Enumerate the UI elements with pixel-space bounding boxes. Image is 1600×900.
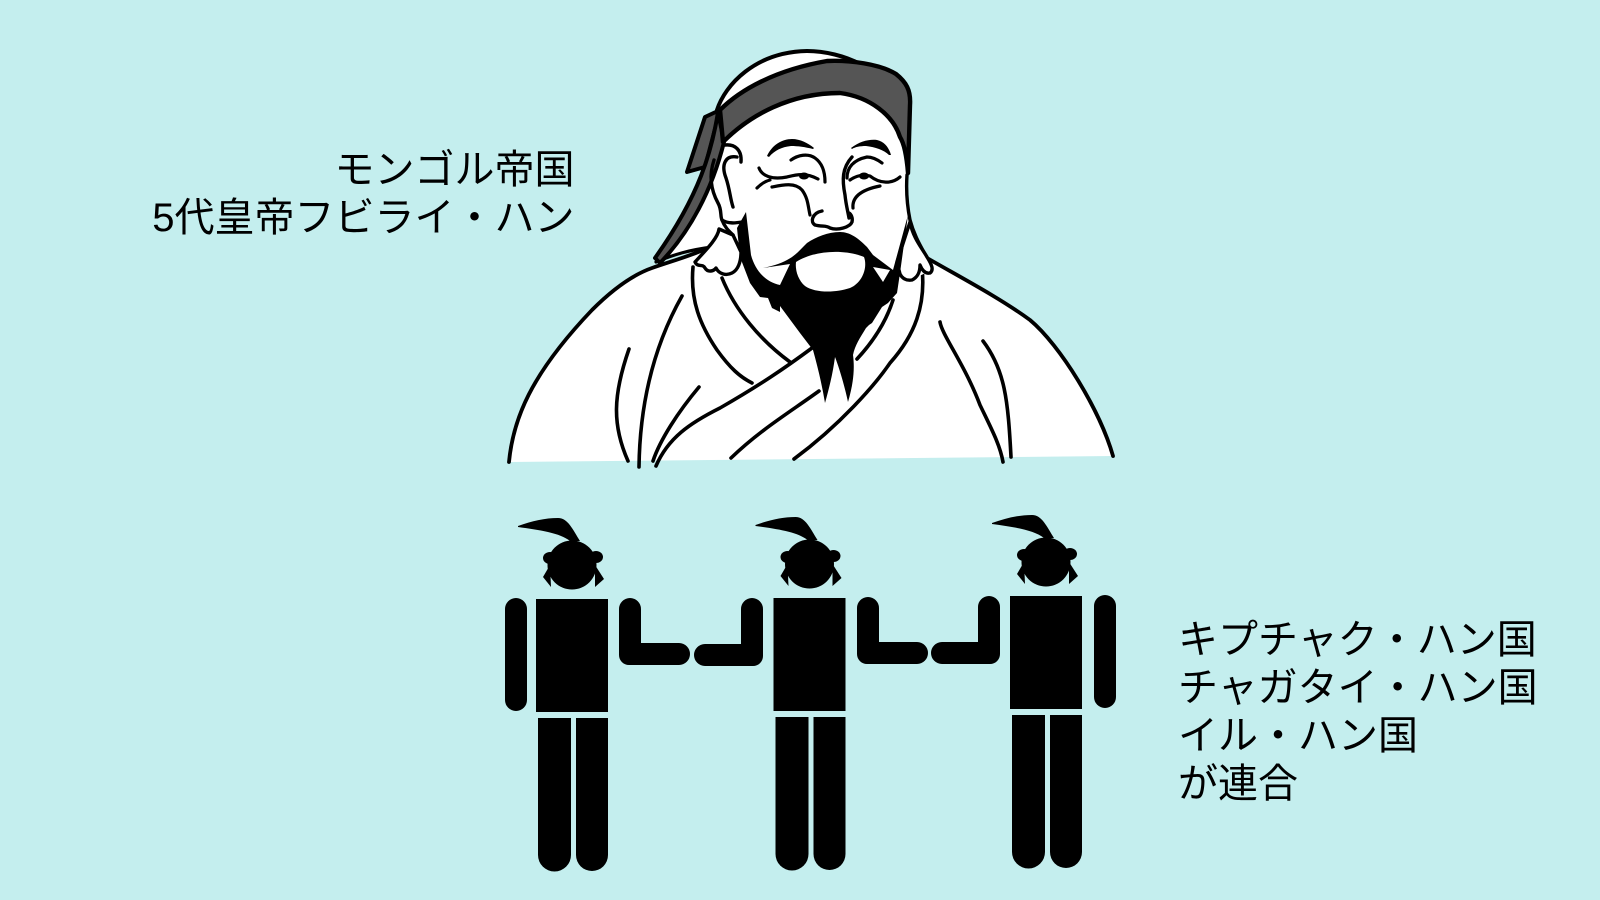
right face edge	[907, 175, 927, 258]
strap gap	[656, 247, 712, 266]
text: khanates union: が連合	[1178, 762, 1298, 806]
figure: left khanate person	[505, 518, 608, 872]
hat white crown	[717, 51, 860, 115]
left eye	[757, 155, 825, 215]
arm: left person right arm	[619, 598, 690, 665]
beard	[737, 212, 908, 403]
text: khanates union: イル・ハン国	[1178, 714, 1418, 758]
robe body	[509, 200, 1113, 462]
illustration: Kublai Khan portrait	[509, 51, 1113, 467]
text: emperor label: モンゴル帝国	[334, 148, 574, 192]
collar ruff right	[897, 222, 932, 280]
text: khanates union: チャガタイ・ハン国	[1178, 666, 1538, 710]
hat side flap	[687, 110, 720, 172]
text: emperor label	[152, 148, 574, 240]
right eye	[847, 157, 900, 208]
figure: right khanate person	[992, 515, 1116, 869]
arm: right person left arm	[931, 596, 1000, 664]
shoulder outline left	[509, 250, 703, 462]
lips	[796, 252, 865, 292]
arm: middle person left arm	[694, 598, 763, 666]
arm: middle person right arm	[857, 597, 928, 664]
collar ruff left	[695, 229, 741, 274]
arm: right person lowered arm	[1094, 595, 1116, 708]
text: emperor label: 5代皇帝フビライ・ハン	[152, 196, 574, 240]
text: khanates union	[1178, 618, 1538, 806]
hat tail	[655, 112, 724, 263]
figure: middle khanate person	[756, 517, 846, 871]
arm: left person lowered arm	[505, 598, 527, 711]
ear	[725, 145, 741, 162]
nose	[812, 157, 852, 229]
eyebrows	[767, 139, 814, 157]
text: khanates union: キプチャク・ハン国	[1178, 618, 1537, 662]
collar and robe folds	[616, 267, 1011, 467]
strap line	[656, 247, 712, 262]
shoulder outline right	[927, 258, 1113, 456]
head and neck	[656, 93, 932, 290]
hat band	[720, 61, 910, 173]
beard highlight right	[873, 267, 890, 282]
